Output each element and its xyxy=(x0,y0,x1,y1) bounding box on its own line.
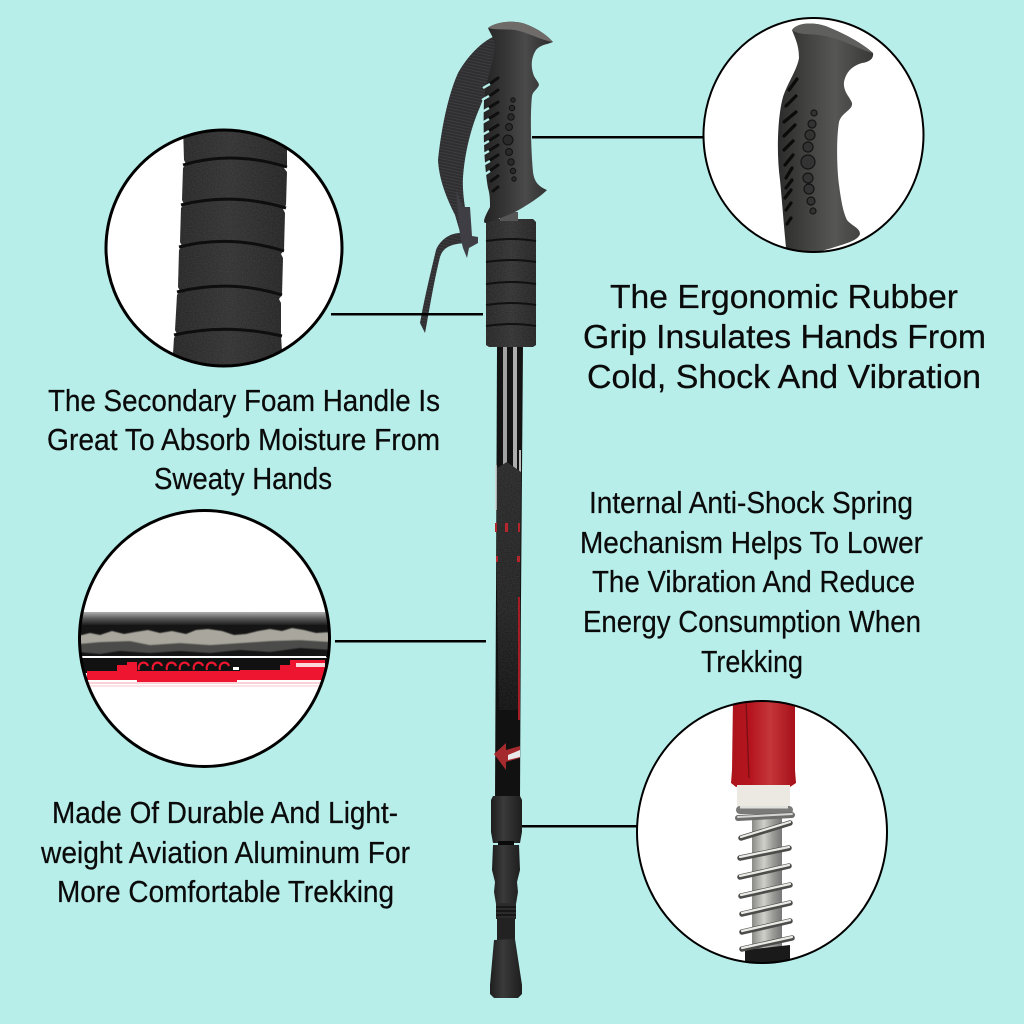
text block: anti-shock spring mechanism xyxy=(580,485,923,679)
red graphic strip xyxy=(87,660,325,680)
tube gradient xyxy=(82,612,328,625)
text block: anti-shock spring mechanism: Internal Anti-Shock Spring xyxy=(589,485,913,520)
trekking pole product photo xyxy=(420,22,553,998)
twist lock xyxy=(491,796,522,843)
foam handle xyxy=(486,219,536,347)
text block: anti-shock spring mechanism: Trekking xyxy=(701,644,803,679)
leader line: grip xyxy=(532,136,704,138)
detail circle: foam handle xyxy=(106,125,342,370)
scallop marks xyxy=(139,663,229,670)
detail circle: anti-shock spring xyxy=(637,698,887,965)
rubber tip xyxy=(490,939,522,998)
spring top rings xyxy=(736,806,793,818)
text block: ergonomic rubber grip: The Ergonomic Rubber xyxy=(610,278,958,315)
white line xyxy=(82,656,326,657)
white collar xyxy=(737,785,790,807)
text block: secondary foam handle: Sweaty Hands xyxy=(154,461,332,496)
text block: secondary foam handle xyxy=(47,383,440,496)
pink fade xyxy=(137,680,237,682)
text block: secondary foam handle: Great To Absorb Moisture From xyxy=(47,422,440,457)
spring coils xyxy=(740,823,792,949)
text block: ergonomic rubber grip: Grip Insulates Hands From xyxy=(583,318,986,355)
dark tube body xyxy=(78,625,332,657)
text block: aviation aluminum xyxy=(40,795,410,909)
text block: aviation aluminum: weight Aviation Aluminum For xyxy=(40,835,410,870)
rubber grip xyxy=(482,22,553,223)
shaft lower section xyxy=(494,462,521,800)
detail circle: ergonomic rubber grip xyxy=(704,18,924,256)
text block: anti-shock spring mechanism: The Vibration And Reduce xyxy=(592,564,915,599)
detail circle: aluminum tube xyxy=(78,510,332,766)
leader line: spring xyxy=(522,825,637,828)
leader line: aluminum shaft xyxy=(335,640,486,642)
rough grey band xyxy=(78,628,332,654)
text block: anti-shock spring mechanism: Mechanism Helps To Lower xyxy=(580,525,923,560)
text block: ergonomic rubber grip xyxy=(583,278,986,395)
black strip xyxy=(78,658,332,673)
red sleeve xyxy=(731,698,796,787)
text block: anti-shock spring mechanism: Energy Consumption When xyxy=(583,604,921,639)
text block: aviation aluminum: More Comfortable Trekking xyxy=(57,874,394,909)
wrist strap xyxy=(420,36,497,333)
text block: ergonomic rubber grip: Cold, Shock And Vibration xyxy=(587,358,981,395)
lower shaft and thread xyxy=(492,841,520,943)
inner rod xyxy=(752,818,782,949)
leader line: foam handle xyxy=(331,313,483,316)
dark base xyxy=(745,945,790,962)
text block: secondary foam handle: The Secondary Foam Handle Is xyxy=(48,383,440,418)
text block: aviation aluminum: Made Of Durable And Light- xyxy=(52,795,398,830)
shaft upper section xyxy=(495,345,523,600)
highlight block xyxy=(233,667,239,670)
